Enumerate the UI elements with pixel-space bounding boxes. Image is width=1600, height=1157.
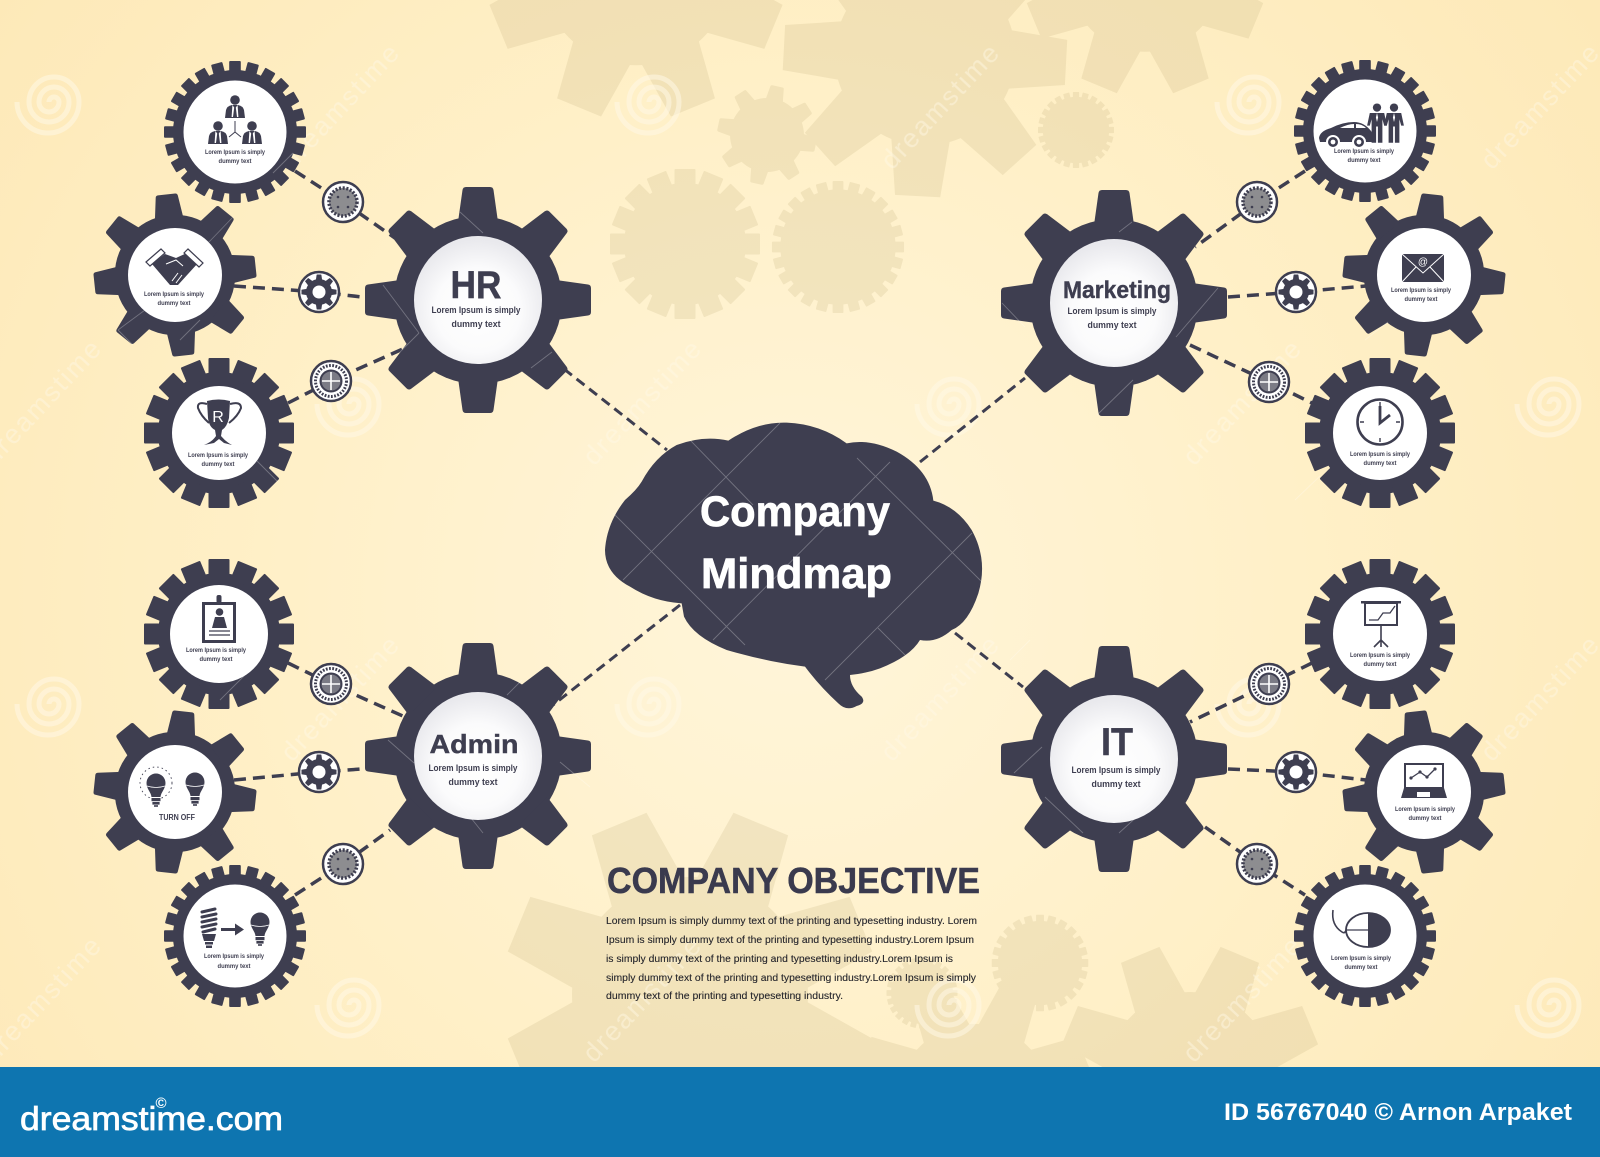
text block: objective paragraph: simply dummy text of the printing and typesetting industry.Lorem Ipsum is simply <box>606 972 977 984</box>
gear: organisation: dummy text <box>218 158 252 165</box>
gear: mouse: dummy text <box>1344 964 1378 971</box>
gear: Admin: Admin <box>430 729 518 759</box>
gear: laptop <box>1335 703 1513 881</box>
dashed connectors <box>234 171 1366 895</box>
gear: HR <box>365 187 591 413</box>
gear: car and people: dummy text <box>1348 157 1381 164</box>
icon: clock <box>1358 400 1402 444</box>
gear: car and people <box>1294 60 1436 202</box>
gear: Marketing: dummy text <box>1088 320 1137 331</box>
gear: presentation board: dummy text <box>1364 661 1397 668</box>
gear: IT <box>1001 646 1227 872</box>
watermark text: dreamstime <box>1177 930 1308 1068</box>
text block: objective paragraph: Ipsum is simply dummy text of the printing and typesetting industry.Lorem Ipsum <box>606 934 974 946</box>
gear: Admin: Lorem Ipsum is simply <box>428 763 518 774</box>
gear: clock: dummy text <box>1364 460 1397 467</box>
gear: car and people: Lorem Ipsum is simply <box>1334 148 1394 155</box>
brain title: Mindmap <box>701 550 892 598</box>
gear: energy saving <box>164 865 306 1007</box>
gear: mail: dummy text <box>1404 296 1438 303</box>
gear: mail: Lorem Ipsum is simply <box>1391 287 1451 294</box>
brain title: Company <box>700 488 890 536</box>
watermark text: dreamstime <box>275 629 406 767</box>
gear: IT: dummy text <box>1092 779 1141 790</box>
gear: IT: IT <box>1101 721 1133 764</box>
watermark text: dreamstime <box>275 37 406 175</box>
gear: Marketing: Marketing <box>1063 277 1171 304</box>
watermark text: dreamstime <box>875 629 1006 767</box>
gear: Admin: dummy text <box>448 777 498 788</box>
icon: handshake <box>146 249 203 285</box>
heading: company objective: COMPANY OBJECTIVE <box>607 860 980 901</box>
icon: envelope: @ <box>1418 257 1428 268</box>
gear: Admin <box>365 643 591 869</box>
gear: mouse <box>1294 865 1436 1007</box>
gear: id card: dummy text <box>200 656 233 663</box>
footer logo: dreamstime.com <box>20 1100 283 1137</box>
gear: HR: Lorem Ipsum is simply <box>432 305 521 316</box>
gear: organisation: Lorem Ipsum is simply <box>205 149 265 156</box>
central brain <box>605 423 982 708</box>
gear: presentation board: Lorem Ipsum is simply <box>1350 652 1410 659</box>
connector nodes <box>299 182 1316 884</box>
text block: objective paragraph: is simply dummy text of the printing and typesetting industry.Lorem Ipsum is <box>606 953 953 965</box>
background gears <box>442 0 1318 1067</box>
gear: trophy: dummy text <box>202 461 235 468</box>
gear: presentation board <box>1305 559 1455 709</box>
brain title <box>700 488 892 598</box>
footer credit: ID 56767040 © Arnon Arpaket <box>1224 1099 1572 1126</box>
gear: id card: Lorem Ipsum is simply <box>186 647 246 654</box>
icon: bulbs <box>140 767 204 807</box>
gear: light bulbs <box>86 703 264 881</box>
icon: trophy: R <box>212 409 224 426</box>
gear: HR: dummy text <box>452 319 501 330</box>
gear: id card <box>144 559 294 709</box>
icon: laptop chart <box>1401 764 1447 798</box>
icon: envelope <box>1402 254 1444 282</box>
watermark text: dreamstime <box>1177 333 1308 471</box>
gear: mail <box>1335 186 1513 364</box>
icon: bulb swap <box>202 909 270 948</box>
gear: clock: Lorem Ipsum is simply <box>1350 451 1410 458</box>
gear: energy saving: dummy text <box>218 963 251 970</box>
gear: trophy: Lorem Ipsum is simply <box>188 452 248 459</box>
watermark lines over dark shapes <box>118 153 1388 833</box>
text block: objective paragraph <box>606 915 977 1002</box>
gear: organisation <box>164 61 306 203</box>
brain shape <box>605 423 982 708</box>
footer band <box>0 1067 1600 1157</box>
gear: handshake <box>86 186 264 364</box>
watermark text: dreamstime <box>577 930 708 1068</box>
gear: HR: HR <box>450 264 502 307</box>
watermark text: dreamstime <box>577 333 708 471</box>
icon: trophy <box>198 400 241 445</box>
gear: Marketing: Lorem Ipsum is simply <box>1068 306 1157 317</box>
gear: energy saving: Lorem Ipsum is simply <box>204 953 264 960</box>
text block: objective paragraph: dummy text of the printing and typesetting industry. <box>606 990 843 1002</box>
gear: clock <box>1305 358 1455 508</box>
footer logo mark: © <box>155 1095 167 1112</box>
gear: mouse: Lorem Ipsum is simply <box>1331 955 1391 962</box>
watermark text: dreamstime <box>875 37 1006 175</box>
icon: presentation board <box>1361 601 1401 647</box>
icon: id badge <box>204 595 234 642</box>
gear: trophy <box>144 358 294 508</box>
gear: IT: Lorem Ipsum is simply <box>1072 765 1161 776</box>
text block: objective paragraph: Lorem Ipsum is simply dummy text of the printing and typesetting industry. Lorem <box>606 915 977 927</box>
gear: light bulbs: TURN OFF <box>159 813 195 822</box>
gear: handshake: Lorem Ipsum is simply <box>144 291 204 298</box>
gear: laptop: dummy text <box>1408 815 1442 822</box>
gear: laptop: Lorem Ipsum is simply <box>1395 806 1455 813</box>
gear: Marketing <box>1001 190 1227 416</box>
icon: three people <box>208 95 262 144</box>
gear: handshake: dummy text <box>158 300 191 307</box>
icon: car and two men <box>1319 103 1404 147</box>
icon: computer mouse <box>1333 910 1390 947</box>
